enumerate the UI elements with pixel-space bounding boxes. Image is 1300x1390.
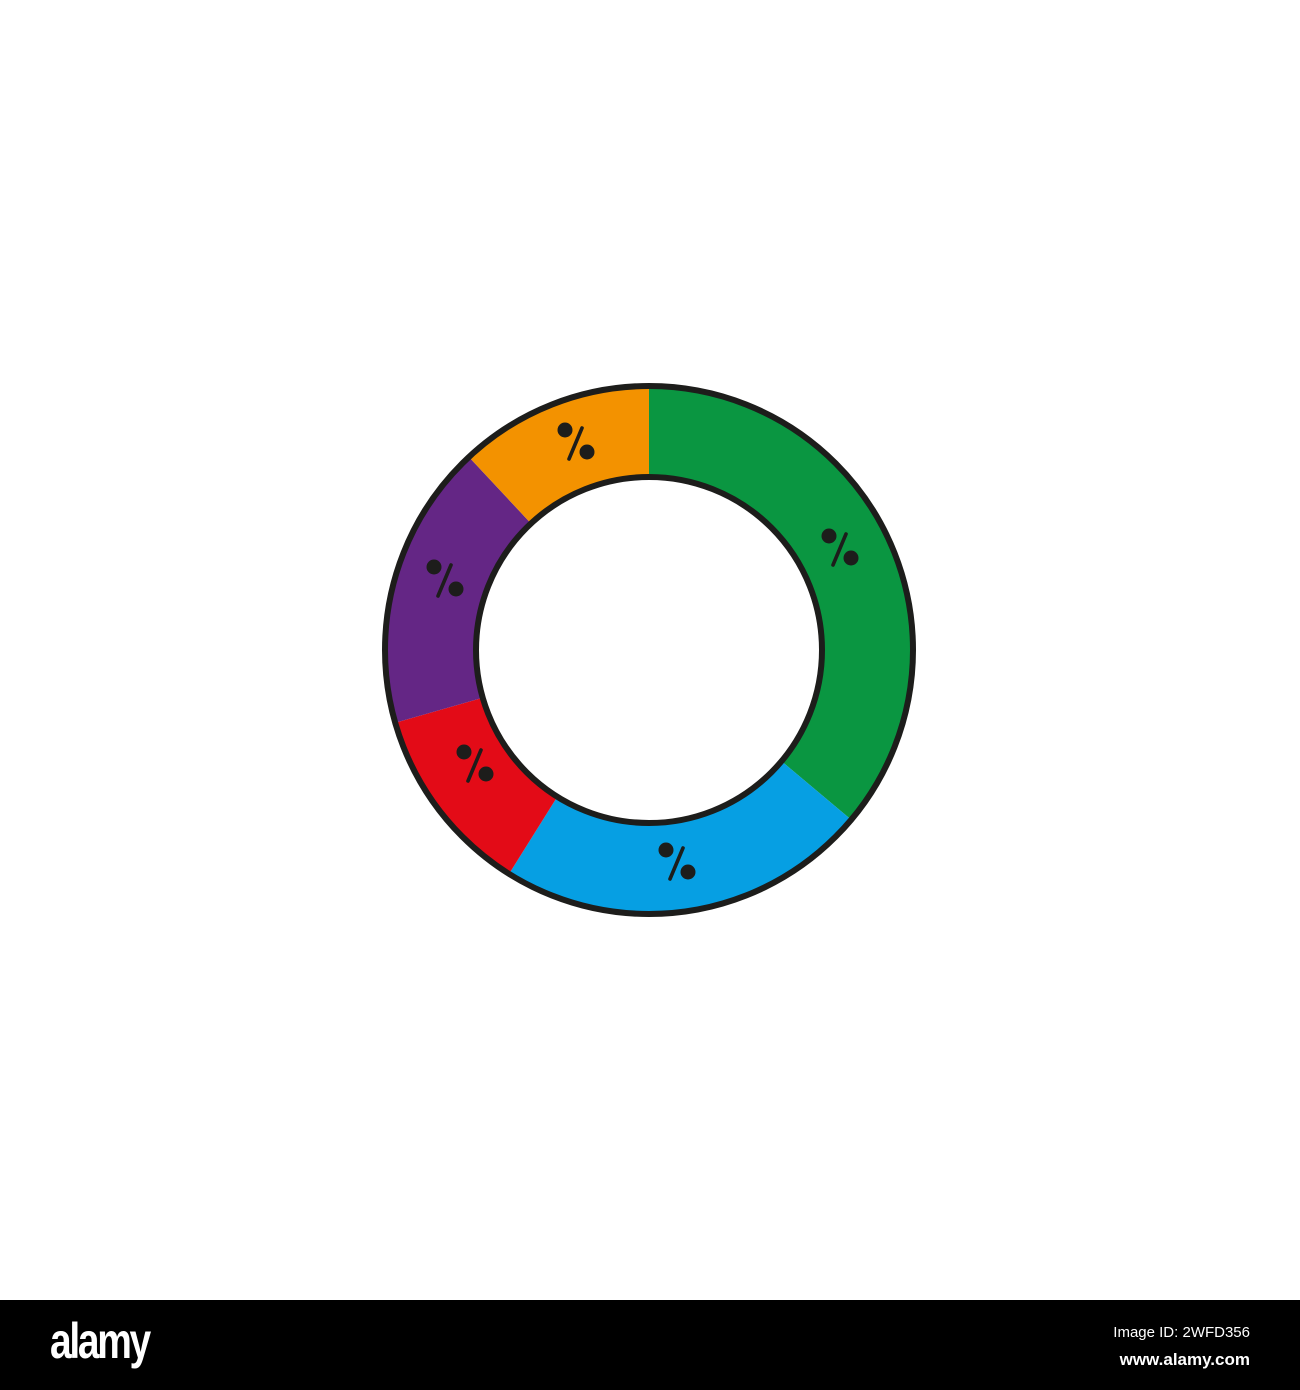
ring outline (385, 386, 913, 914)
segment: orange (470, 387, 649, 524)
image id: Image ID: 2WFD356 (1113, 1324, 1250, 1341)
icon: percent purple (426, 560, 464, 596)
segment: blue (510, 761, 850, 913)
icon: percent green (822, 528, 858, 566)
segment: green (649, 387, 912, 819)
icon: percent orange (558, 422, 594, 460)
footer bar (0, 1300, 1300, 1390)
logo: alamy (50, 1313, 149, 1369)
icon: percent red (456, 744, 494, 782)
website: www.alamy.com (1120, 1350, 1250, 1369)
segment: red (396, 698, 557, 873)
segment: purple (386, 458, 531, 722)
icon: percent blue (658, 842, 696, 880)
